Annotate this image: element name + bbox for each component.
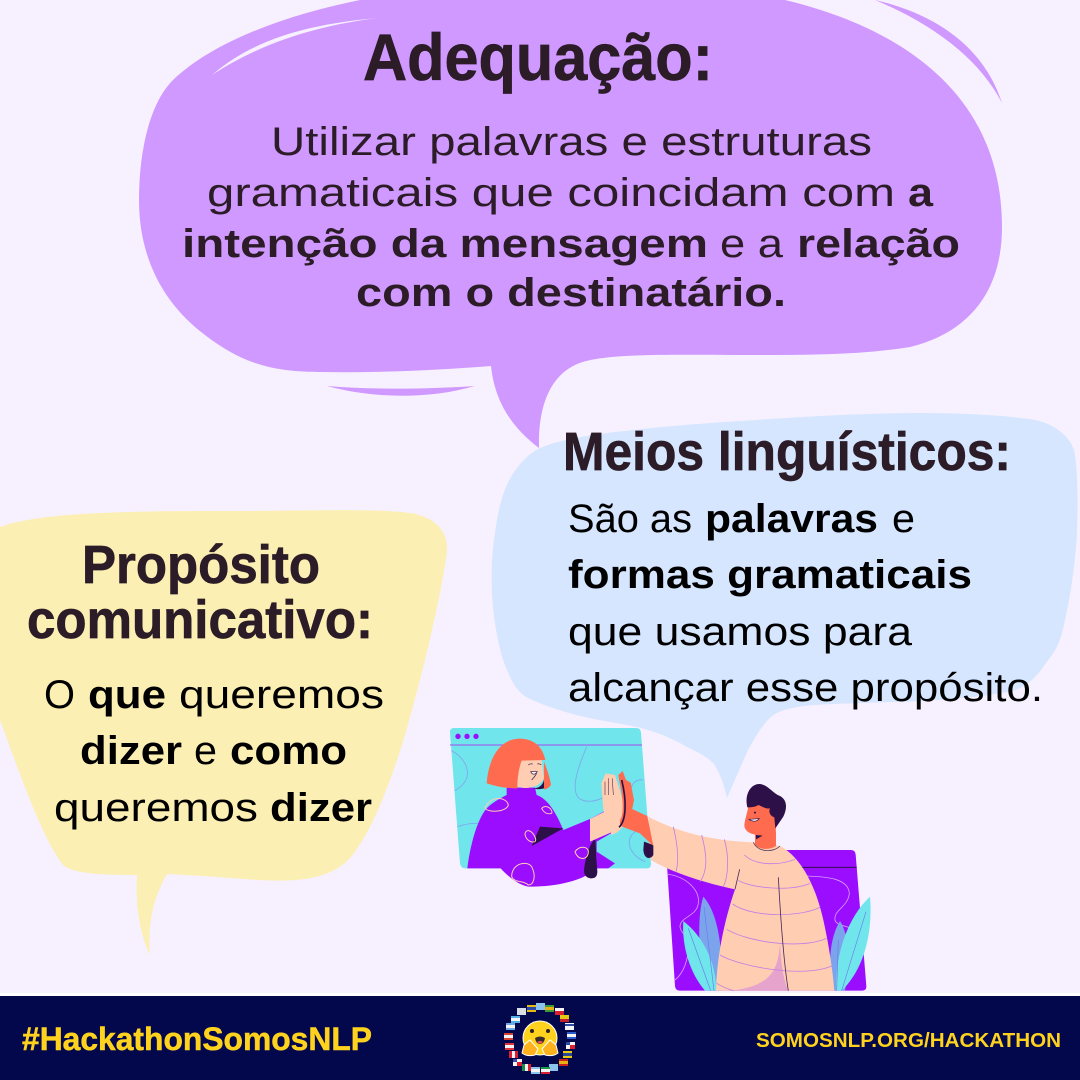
text block: meios description: formas gramaticais [568,553,972,597]
yellow bubble shape [0,510,447,955]
woman [467,788,617,887]
icon: purple window behind man [666,850,866,991]
text block: adequação description: e a [720,222,784,266]
panel: propósito comunicativo speech bubble [0,510,447,955]
text block: propósito description: como [230,729,347,773]
footer url: SOMOSNLP.ORG/HACKATHON [756,1030,1061,1052]
text block: propósito description: dizer [80,729,182,773]
text block: meios description: São as [568,497,692,541]
icon: hugging face logo with ring of flags [504,1003,576,1074]
icon: video call window with woman [450,728,651,887]
panel: meios linguísticos speech bubble [492,413,1078,798]
text block: propósito description: queremos [54,786,258,830]
text block: adequação description: gramaticais que coincidam com [207,171,895,215]
text block: adequação description: intenção da mensagem [182,222,708,266]
heading: Propósito comunicativo: comunicativo: [27,590,373,650]
text block: propósito description [44,673,384,830]
text block: adequação description: com o destinatário. [356,271,786,315]
purple bubble shape [139,0,1002,448]
heading: Propósito comunicativo: Propósito [82,535,320,595]
text block: adequação description [182,120,960,315]
text block: adequação description: Utilizar palavras e estruturas [271,120,872,164]
heading: Propósito comunicativo [27,535,373,650]
text block: meios description: que usamos para [568,610,913,654]
flags ring [504,1003,576,1074]
hugging face emoji [522,1021,558,1056]
footer hashtag: #HackathonSomosNLP [22,1021,372,1057]
decorative highlight arcs [212,0,1002,396]
text block: adequação description: relação [797,222,960,266]
heading: Adequação: Adequação: [363,20,713,94]
text block: meios description [568,497,1043,710]
text block: meios description: alcançar esse propósito. [568,666,1043,710]
illustration: high five between video call and man [450,728,871,991]
text block: propósito description: O [44,673,75,717]
heading: Meios linguísticos: Meios linguísticos: [563,422,1011,482]
text block: propósito description: e [194,729,217,773]
icon: leaves [683,897,871,991]
text block: adequação description: a [908,171,934,215]
text block: propósito description: que [88,673,166,717]
text block: meios description: e [892,497,915,541]
footer band [0,993,1080,1080]
text block: propósito description: queremos [179,673,384,717]
panel: adequação speech bubble [139,0,1002,448]
text block: propósito description: dizer [270,786,372,830]
text block: meios description: palavras [705,497,878,541]
blue bubble shape [492,413,1078,798]
man [618,771,834,991]
